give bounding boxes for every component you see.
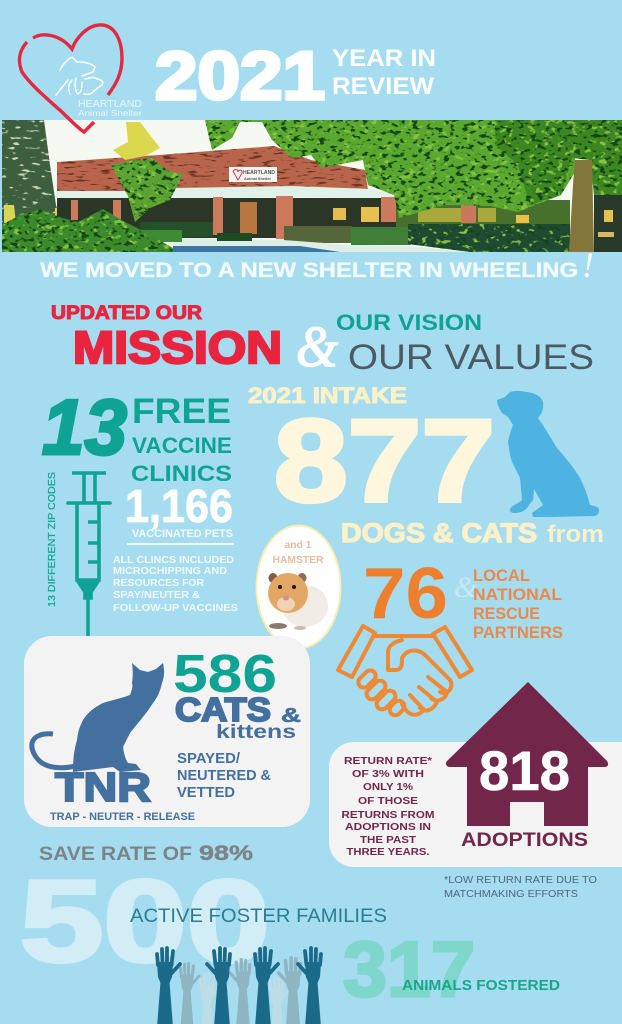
our vision: OUR VISION [336,310,482,335]
our values: OUR VALUES [348,338,594,377]
panel: adoptions [329,682,622,867]
footnote: MATCHMAKING EFFORTS [444,888,578,900]
logo text: HEARTLAND [78,99,142,110]
low hedges [140,222,213,237]
title: 2021 year in review: 2021 [155,38,325,114]
dogs and cats label: DOGS & CATS [341,518,537,548]
cat and dog mark [56,57,103,95]
icon: cat silhouette [32,663,164,772]
spayed neutered vetted: VETTED [177,784,235,801]
mission vision and values heading [51,303,594,379]
clinic details: ALL CLINCS INCLUDED [113,554,234,566]
ground floor windows [57,198,397,238]
heading: new shelter announcement: WE MOVED TO A NEW SHELTER IN WHEELING [40,258,578,282]
updated our mission: UPDATED OUR [51,303,202,324]
footnote: *LOW RETURN RATE DUE TO [444,874,597,886]
photo: new shelter building [2,120,622,252]
entrance door [240,202,257,234]
return rate text: OF THOSE [358,795,418,807]
free vaccine clinics: CLINICS [131,461,232,486]
zip codes label: 13 DIFFERENT ZIP CODES [46,472,58,607]
panel: intake [248,383,604,548]
intake number: 877 [274,395,495,526]
icon: raised hands [157,948,321,1024]
icon: syringe [68,473,110,650]
yellow light behind the pine [4,205,57,223]
canopy darker right half [495,120,622,205]
heart outline [19,25,122,132]
brick upper wall [57,146,368,192]
intake label: 2021 INTAKE [248,383,407,408]
free vaccine clinics: VACCINE [132,433,232,458]
icon: hamster [268,573,328,630]
return rate text: RETURN RATE* [344,755,433,767]
building sign: HEARTLAND [243,170,275,176]
panel: vaccine clinics [42,383,238,650]
number 586: 586 [173,644,277,704]
building sign: Animal Shelter [244,176,271,181]
front bushes [2,209,173,252]
tree trunk [569,160,594,252]
heading: new shelter announcement: ! [582,245,594,285]
callout: and 1 hamster: HAMSTER [272,555,324,566]
callout: and 1 hamster: and 1 [284,540,312,551]
number 13: 13 [42,383,127,471]
spayed neutered vetted [177,750,271,801]
adoptions number: 818 [479,739,570,802]
pine tree at left [2,120,62,225]
spayed neutered vetted: SPAYED/ [177,750,241,767]
icon: handshake [338,626,472,718]
save rate [39,842,253,865]
spayed neutered vetted: NEUTERED & [177,767,271,784]
icon: house [446,682,608,826]
animals fostered number: 317 [343,925,475,1013]
ground lawn bands [284,226,352,243]
animals fostered label: ANIMALS FOSTERED [402,978,560,994]
small yellow-green tree [111,158,183,222]
number 76: 76 [363,554,448,634]
white fascia [57,186,397,199]
return rate text: ONLY 1% [363,781,414,793]
background behind lower canopy [396,200,570,227]
clinic details: SPAY/NEUTER & [113,589,200,601]
return rate text: THREE YEARS. [346,846,430,858]
foster families number: 500 [20,856,270,986]
TNR letters: TNR [55,764,151,810]
trap neuter release: TRAP - NEUTER - RELEASE [50,811,195,823]
adoptions label: ADOPTIONS [461,830,588,851]
partner labels: LOCAL [473,566,530,585]
foster families label: ACTIVE FOSTER FAMILIES [130,906,387,927]
callout: and 1 hamster [256,526,340,648]
panel: rescue partners [338,554,563,718]
title: 2021 year in review: YEAR IN [332,45,436,72]
sidewalk and pavement [173,238,470,252]
brick columns [71,196,396,239]
distant column [461,205,476,223]
return rate text: OF 3% WITH [352,768,424,780]
vaccinated pets count: 1,166 [125,480,233,532]
partner labels: PARTNERS [473,623,563,642]
return rate text: RETURNS FROM [342,809,435,821]
return rate text: THE PAST [360,834,417,846]
clinic details: RESOURCES FOR [113,577,204,589]
clinic details: FOLLOW-UP VACCINES [113,602,238,614]
cats and kittens [175,691,301,743]
cats and kittens: kittens [216,721,296,743]
partner labels: NATIONAL [473,585,562,604]
cats and kittens: & [281,705,301,727]
ampersand: & [296,314,338,379]
building sign [229,167,277,182]
return rate text [342,755,435,858]
panel: intake: from [547,521,604,548]
logo: Heartland Animal Shelter [19,25,142,132]
title: 2021 year in review [155,38,436,114]
logo: Heartland Animal Shelter: Animal Shelter [78,109,142,118]
cats and kittens: CATS [175,691,271,728]
partner labels: RESCUE [473,604,540,623]
small ampersand: & [454,571,478,604]
partner labels [473,566,563,642]
save rate: 98% [199,842,253,865]
return rate text: ADOPTIONS IN [345,821,431,833]
panel: vaccine clinics: VACCINATED PETS [132,528,233,540]
footnote [444,874,597,900]
save rate: SAVE RATE OF [39,844,192,865]
clinic details: MICROCHIPPING AND [113,565,227,577]
canopy tree [205,120,575,218]
icon: dog silhouette [497,391,599,517]
clinic details [113,554,238,614]
heading: new shelter announcement [40,245,594,285]
free vaccine clinics: FREE [132,392,231,431]
mission vision and values heading: MISSION [73,322,282,373]
title: 2021 year in review: REVIEW [332,73,434,100]
panel: TNR cats [24,636,310,827]
free vaccine clinics [131,392,232,486]
right shade and windows [594,195,622,252]
